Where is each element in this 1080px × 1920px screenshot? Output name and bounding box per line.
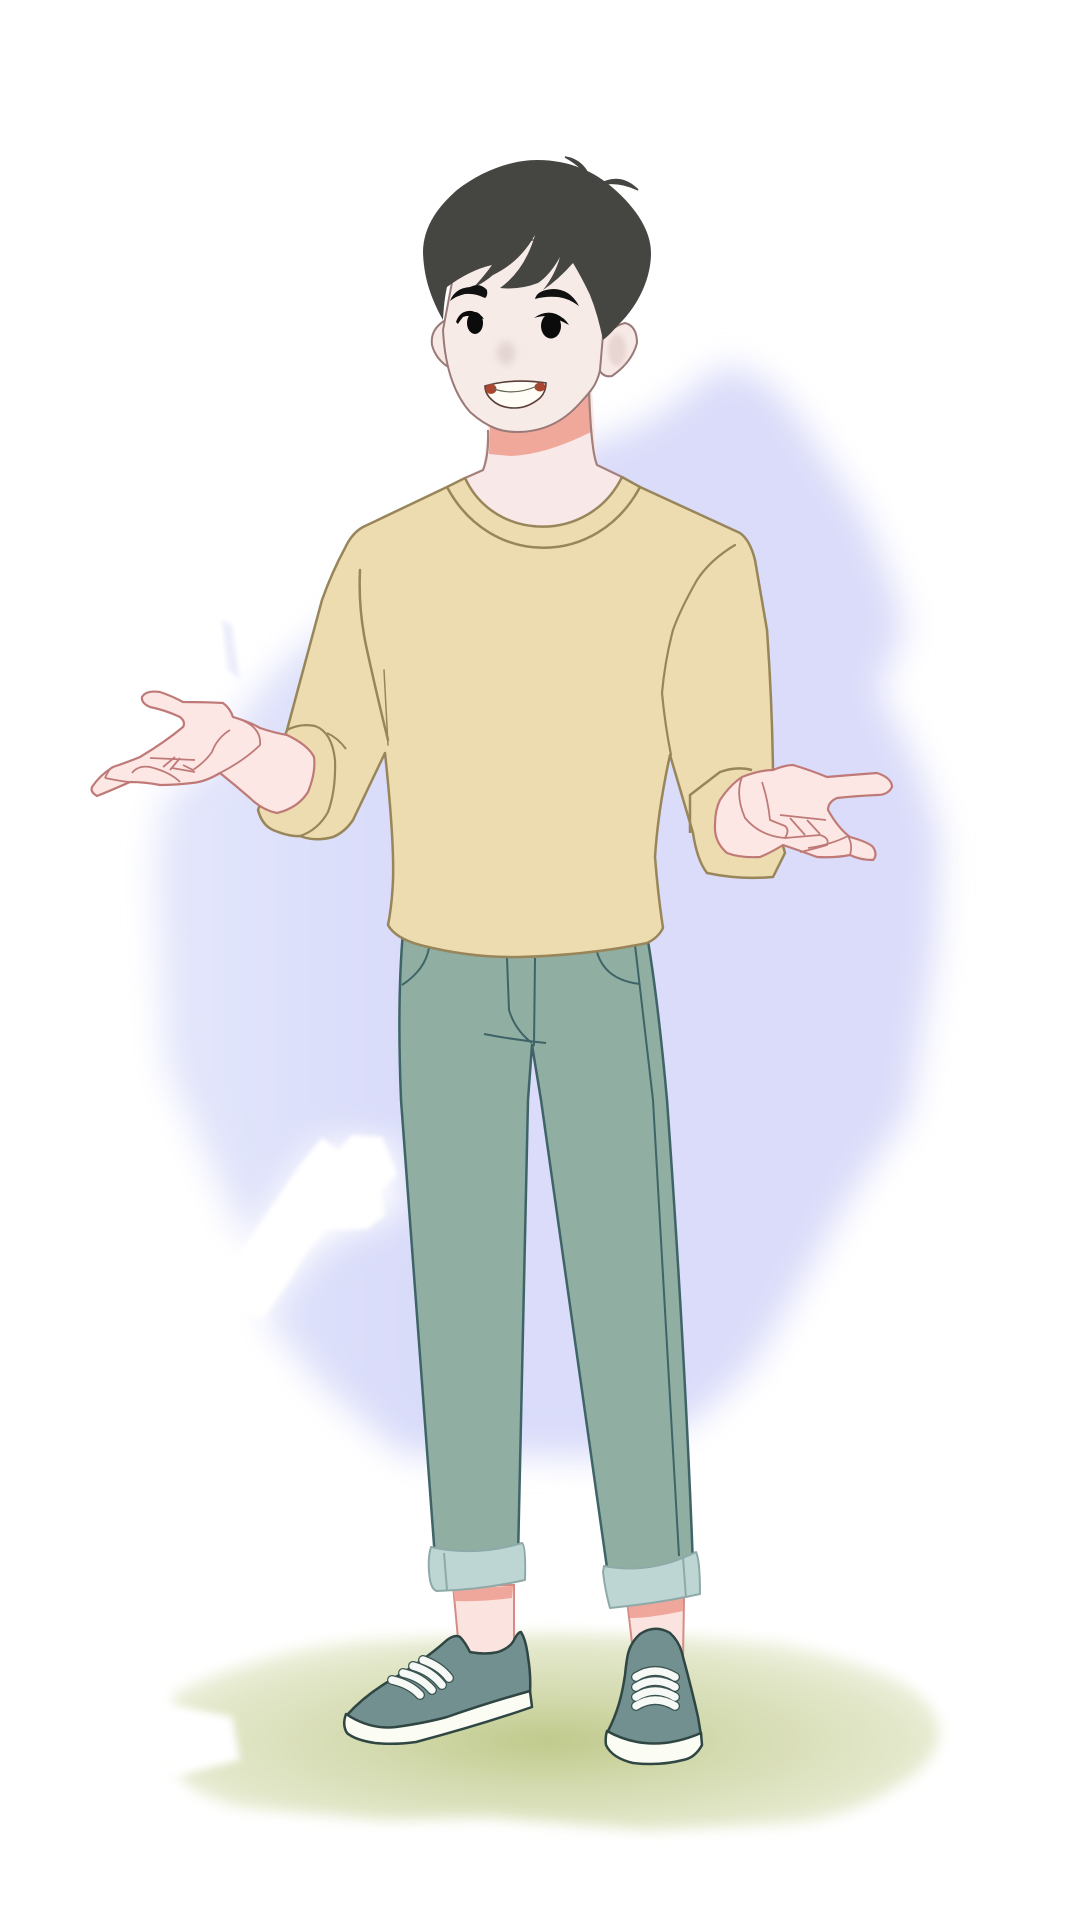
right ankle: [627, 1598, 684, 1660]
shirt: [258, 477, 785, 957]
left ear (viewer right): [598, 323, 637, 376]
face: [443, 240, 603, 432]
viewer-left hand and forearm: [92, 692, 314, 813]
left shoe: [344, 1632, 532, 1744]
viewer-left cuff crease: [327, 733, 346, 749]
trouser seam and pocket lines: [402, 945, 679, 1556]
hair tufts: [565, 157, 638, 190]
viewer-right hand and forearm: [715, 765, 892, 860]
viewer-left sleeve cuff: [287, 725, 335, 836]
right trouser cuff: [603, 1552, 700, 1608]
neck: [465, 385, 622, 560]
shirt seams and collar: [360, 487, 735, 755]
eyes: [456, 311, 569, 338]
eyebrows: [450, 285, 579, 306]
right shoe: [606, 1629, 702, 1764]
trousers: [399, 932, 693, 1575]
fingers and palm lines: [739, 777, 851, 855]
left shoe laces: [392, 1660, 449, 1695]
left ankle: [453, 1585, 514, 1660]
background: olive ground shadow: [150, 1632, 940, 1830]
right ear (viewer left): [432, 321, 452, 368]
ankle shadows: [453, 1586, 683, 1618]
mouth: [485, 381, 546, 408]
viewer-right sleeve cuff: [690, 768, 752, 833]
hair: [423, 157, 651, 340]
right shoe laces: [636, 1671, 675, 1706]
background: lavender watercolor blob: [155, 365, 940, 1458]
left trouser cuff: [429, 1543, 525, 1591]
fingers and palm lines: [105, 717, 260, 782]
nose: [497, 341, 515, 365]
